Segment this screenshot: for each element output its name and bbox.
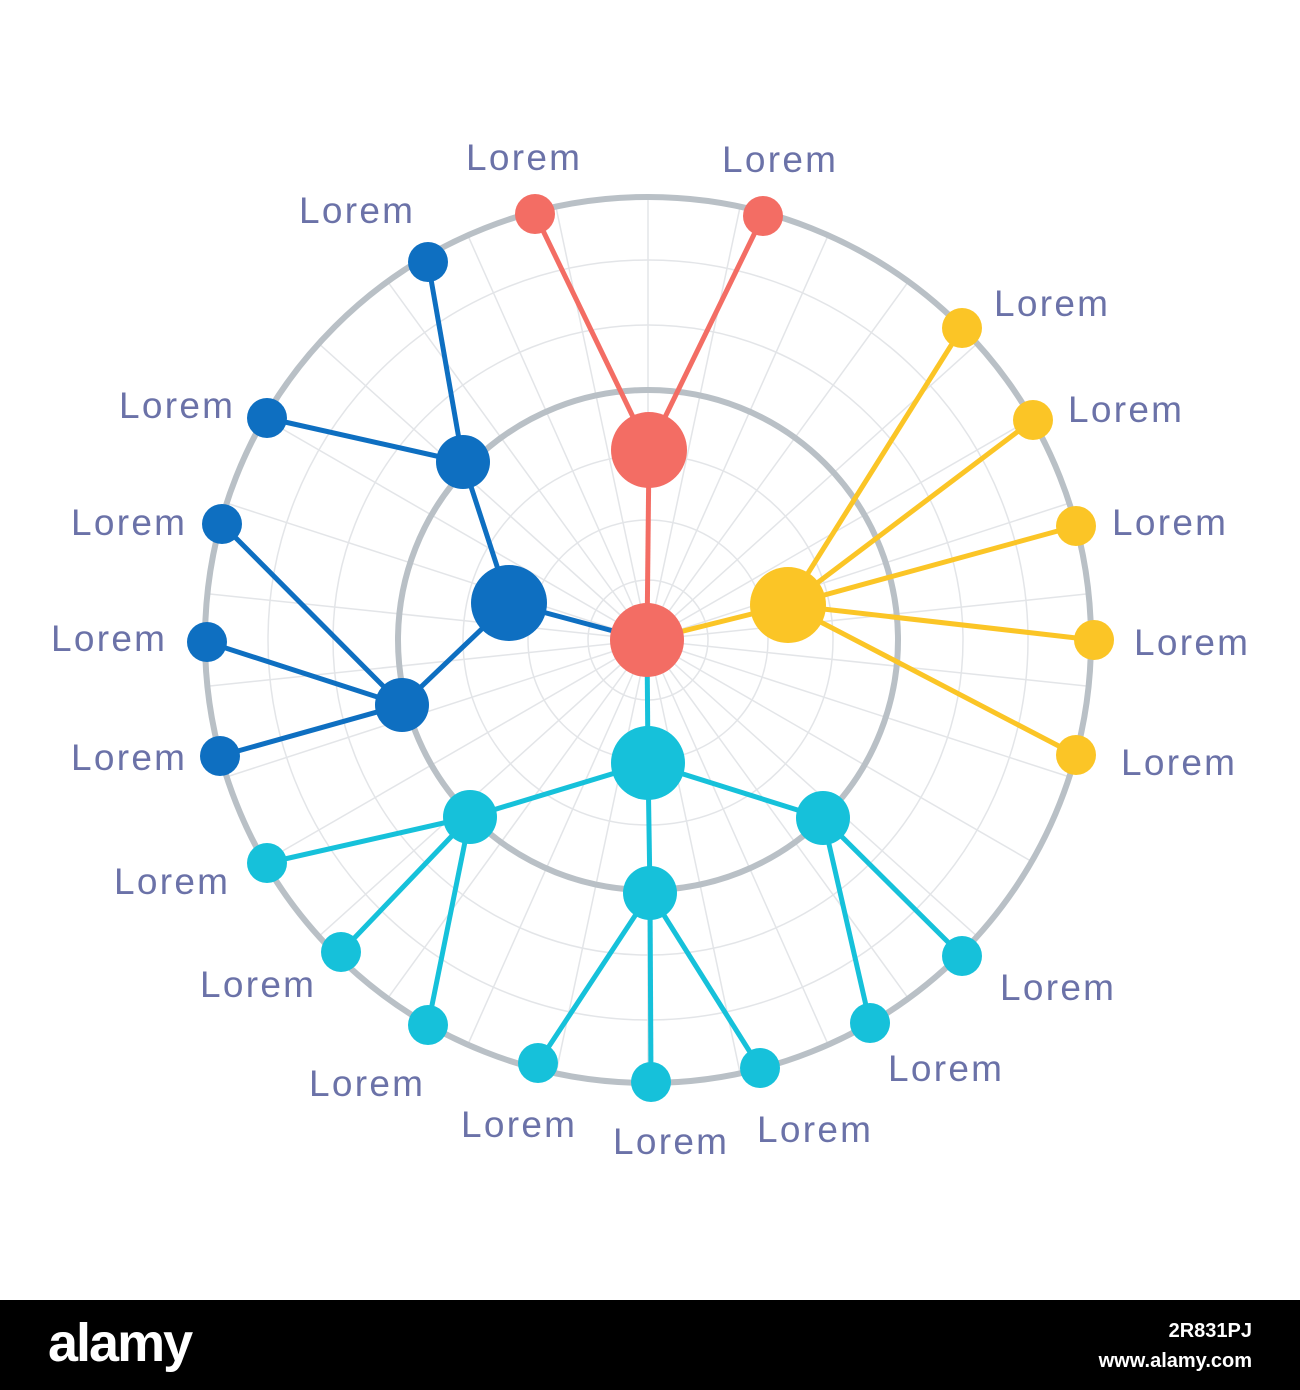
- labels: Lorem: [71, 737, 185, 778]
- labels: Lorem: [71, 502, 185, 543]
- labels: Lorem: [1121, 742, 1235, 783]
- footer logo: alamy: [48, 1313, 191, 1373]
- labels: Lorem: [1068, 389, 1182, 430]
- labels: Lorem: [466, 137, 580, 178]
- footer bar: [0, 1300, 1300, 1390]
- labels: Lorem: [613, 1121, 727, 1162]
- footer id: 2R831PJ: [1169, 1320, 1252, 1342]
- labels: Lorem: [1000, 967, 1114, 1008]
- labels: [51, 137, 1248, 1162]
- labels: Lorem: [119, 385, 233, 426]
- labels: Lorem: [722, 139, 836, 180]
- branch: yellow: [647, 308, 1114, 775]
- branch: red: [515, 194, 783, 640]
- labels: Lorem: [200, 964, 314, 1005]
- footer id: [1098, 1320, 1252, 1372]
- labels: Lorem: [1134, 622, 1248, 663]
- labels: Lorem: [461, 1104, 575, 1145]
- labels: Lorem: [994, 283, 1108, 324]
- labels: Lorem: [299, 190, 413, 231]
- branch: blue: [187, 242, 647, 776]
- labels: Lorem: [51, 618, 165, 659]
- labels: Lorem: [114, 861, 228, 902]
- labels: Lorem: [309, 1063, 423, 1104]
- labels: Lorem: [757, 1109, 871, 1150]
- labels: Lorem: [888, 1048, 1002, 1089]
- labels: Lorem: [1112, 502, 1226, 543]
- branch: cyan: [247, 640, 982, 1102]
- center node: [610, 603, 684, 677]
- footer id: www.alamy.com: [1099, 1350, 1252, 1372]
